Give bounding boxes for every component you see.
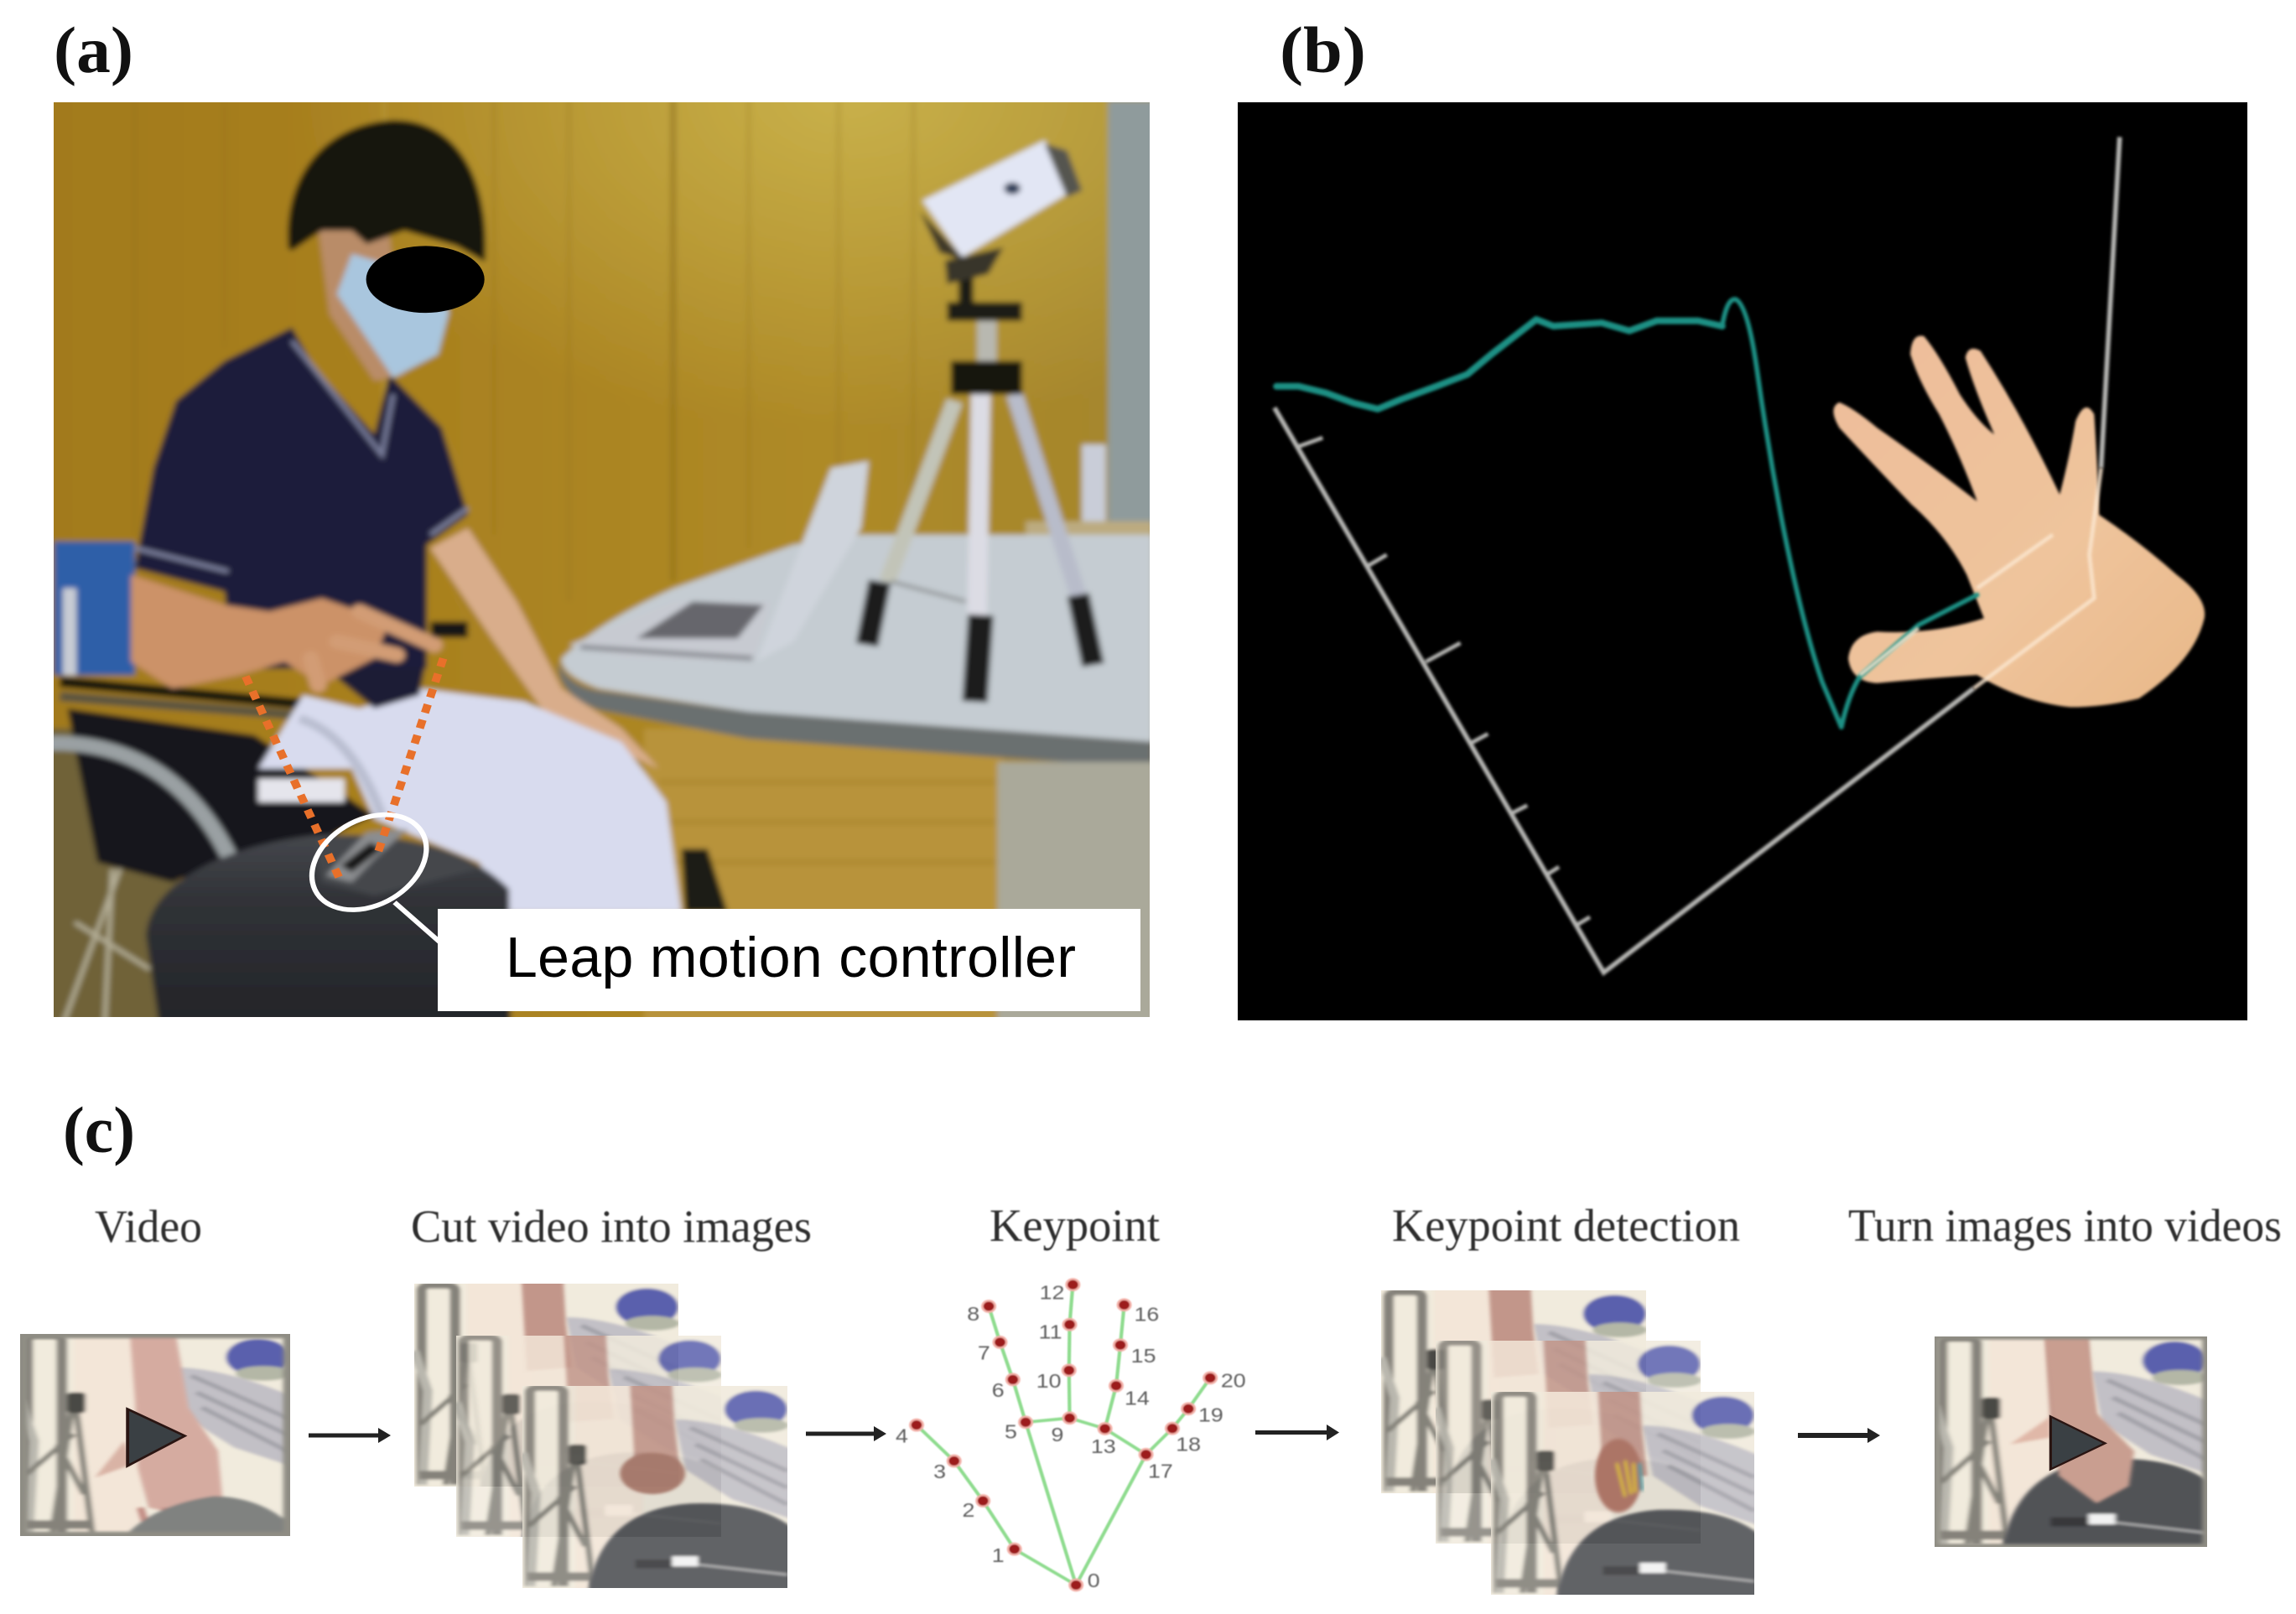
joint numbers: 16 [1134,1304,1159,1326]
arrow: keypoint to detection [1255,1425,1339,1440]
joint numbers: 1 [992,1544,1005,1566]
joint numbers: 2 [963,1500,974,1522]
label box: leap motion controller [438,909,1140,1011]
output video thumbnail with play icon [1930,1333,2212,1550]
face cover [366,246,485,313]
joint numbers: 18 [1176,1434,1201,1456]
detected hand overlay [1595,1439,1642,1513]
floor [644,729,1003,1023]
joint numbers: 20 [1221,1370,1246,1392]
right arm [430,528,659,769]
joint numbers: 3 [933,1461,946,1483]
joint numbers: 7 [978,1342,990,1364]
caption: cut video into images: Cut video into images [411,1201,812,1252]
heading: panel a label: (a) [54,13,133,86]
caption: turn images into videos: Turn images into videos [1848,1200,2282,1251]
joint markers [910,1279,1217,1591]
joint numbers: 12 [1040,1282,1064,1304]
caption: keypoint: Keypoint [990,1200,1160,1251]
joint numbers: 15 [1131,1346,1156,1367]
keypoint hand diagram [896,1279,1246,1591]
dotted field-of-view lines [246,658,444,881]
teal motion trajectory [1276,299,1977,727]
axes seen through hand [1860,468,2101,688]
pants [258,688,682,912]
arrow: video to frames [309,1428,391,1443]
joint numbers: 10 [1036,1371,1062,1393]
joint numbers: 0 [1088,1570,1100,1591]
joint numbers: 17 [1148,1461,1173,1482]
head and mask [318,227,404,381]
image stack: cut frames [409,1280,792,1591]
joint numbers: 4 [896,1425,908,1447]
camera [922,140,1078,257]
panel b: 3D hand trajectory [1238,102,2247,1020]
tripod [887,401,954,582]
video thumbnail with play icon [15,1331,295,1539]
left arm and hand [131,575,389,688]
heading: panel c label: (c) [63,1093,135,1166]
skeleton links [917,1284,1210,1585]
joint numbers: 19 [1198,1404,1223,1426]
joint numbers: 14 [1125,1388,1150,1409]
controller highlight circle [309,812,438,944]
shirt [135,328,468,668]
joint numbers: 13 [1091,1435,1116,1457]
hand model [1833,335,2205,707]
joint numbers: 6 [992,1380,1005,1402]
joint numbers: 9 [1052,1424,1063,1445]
arrow: detection to output video [1798,1428,1880,1443]
heading: panel b label: (b) [1280,13,1366,86]
joint numbers: 11 [1039,1321,1062,1343]
laptop [756,461,869,662]
caption: video: Video [95,1201,202,1252]
axes and ticks [1275,137,2120,973]
wall background [45,94,1161,1030]
label box: leap motion controller: Leap motion controller [506,926,1076,989]
joint numbers [896,1282,1246,1591]
panel a: participant photo with camera and controller [45,94,1161,1030]
joint numbers: 8 [967,1303,979,1325]
joint numbers: 5 [1005,1421,1017,1443]
wheelchair [54,542,135,675]
caption: keypoint detection: Keypoint detection [1392,1200,1740,1251]
image stack: detected keypoints [1376,1287,1759,1598]
stool [146,835,511,1023]
table [562,535,1153,742]
arrow: frames to keypoint [806,1426,886,1441]
